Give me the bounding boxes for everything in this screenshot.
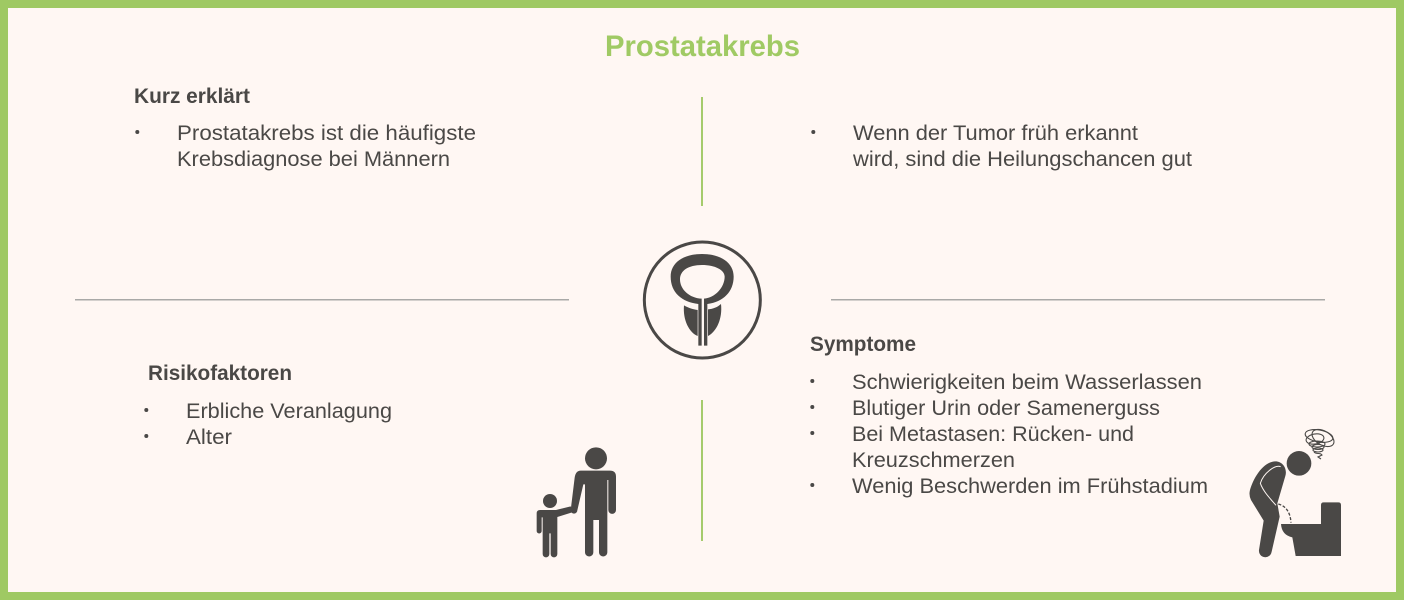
text block: Heilungschancen: Wenn der Tumor früh erkannt xyxy=(853,121,1138,145)
text block: Symptome xyxy=(810,332,1208,498)
symptom list: Blutiger Urin oder Samenerguss xyxy=(852,396,1160,420)
icon: dizzy scribble xyxy=(1304,426,1337,459)
title: Prostatakrebs xyxy=(605,30,800,63)
symptom list: Bei Metastasen: Rücken- und xyxy=(852,422,1134,446)
heading: Symptome: Symptome xyxy=(810,332,916,356)
risk factor list: Alter xyxy=(186,425,232,449)
symptom list: Schwierigkeiten beim Wasserlassen xyxy=(852,370,1202,394)
bullet point: häufigste Krebsdiagnose xyxy=(135,121,476,171)
symptom list xyxy=(810,370,1208,498)
text block: Heilungschancen: wird, sind die Heilungschancen gut xyxy=(852,147,1192,171)
symptom list: Kreuzschmerzen xyxy=(852,448,1015,472)
icon: man with urination difficulty at toilet xyxy=(1249,451,1341,557)
icon: adult holding child's hand xyxy=(537,447,616,557)
bullet point: häufigste Krebsdiagnose: Krebsdiagnose bei Männern xyxy=(177,147,450,171)
risk factor list xyxy=(144,399,392,449)
heading: Kurz erklärt: Kurz erklärt xyxy=(134,84,250,108)
bullet point: häufigste Krebsdiagnose: Prostatakrebs ist die häufigste xyxy=(177,121,476,145)
heading: Risikofaktoren: Risikofaktoren xyxy=(148,361,292,385)
text block: Heilungschancen xyxy=(811,121,1192,171)
text block: Risikofaktoren xyxy=(144,361,392,449)
risk factor list: Erbliche Veranlagung xyxy=(186,399,392,423)
icon: prostate in circle xyxy=(644,242,760,358)
symptom list: Wenig Beschwerden im Frühstadium xyxy=(852,474,1208,498)
text block: Kurz erklärt xyxy=(134,84,476,171)
